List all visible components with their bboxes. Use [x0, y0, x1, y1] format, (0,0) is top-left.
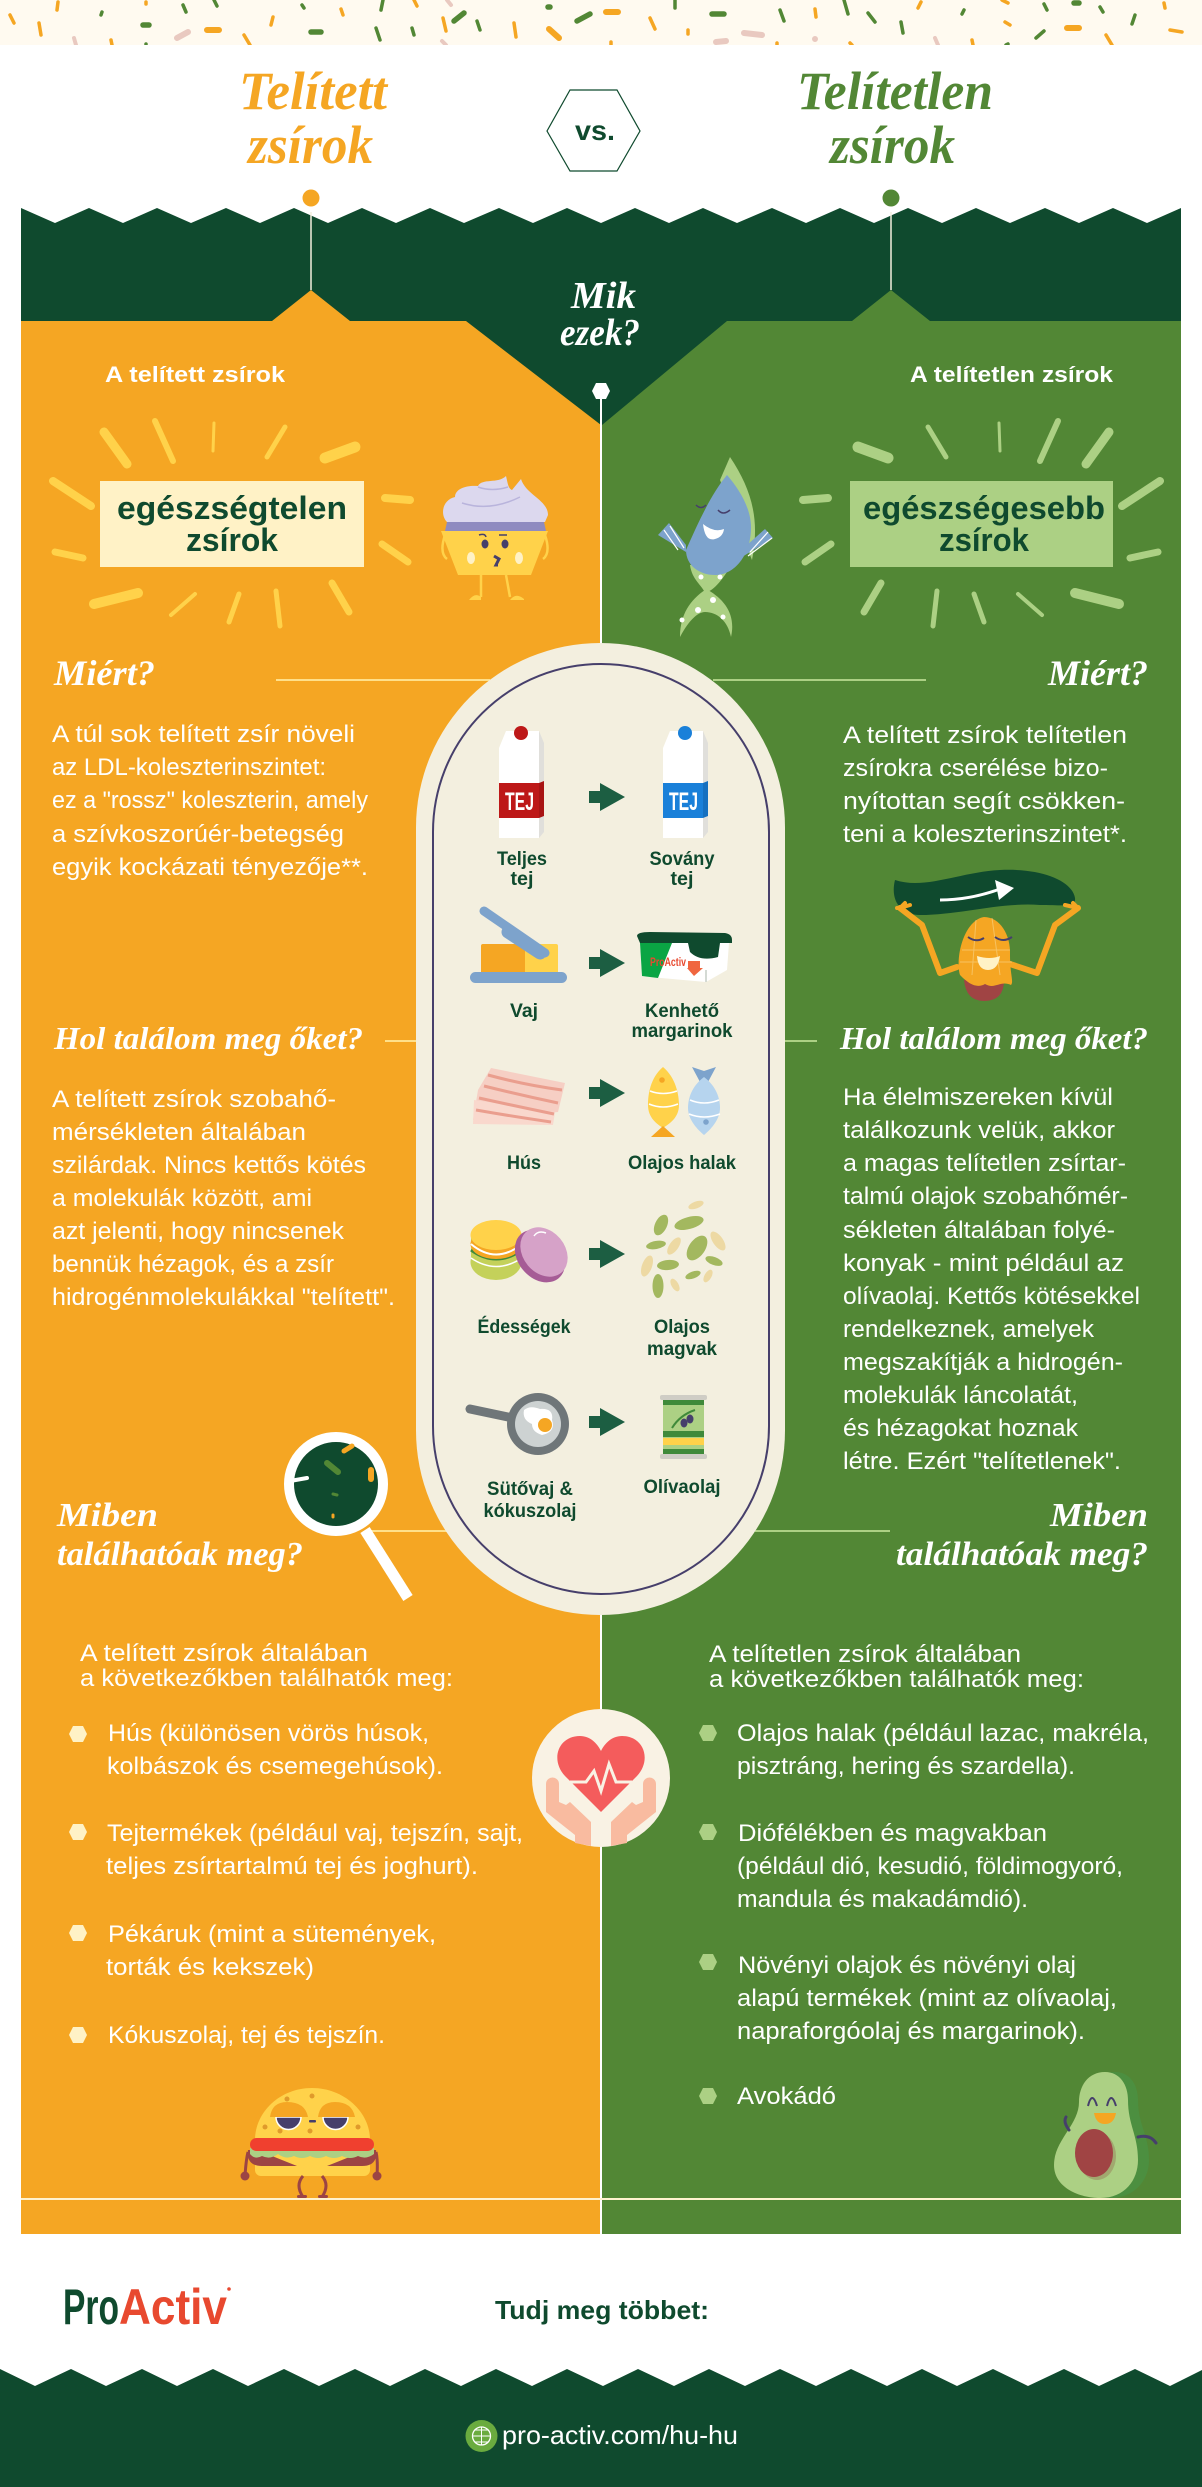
heading: what are these	[560, 275, 640, 354]
label: frying butter and coconut oil: kókuszolaj	[484, 1501, 576, 1522]
bullet list: saturated sources: Hús (különösen vörös húsok,	[108, 1720, 429, 1747]
heading: found in left: Miben	[56, 1497, 158, 1534]
icon: skim milk carton	[663, 726, 708, 838]
icon: butter	[470, 911, 567, 983]
bullet list: unsaturated sources: pisztráng, hering és szardella).	[737, 1753, 1075, 1780]
heading: where left: Hol találom meg őket?	[53, 1020, 363, 1056]
heading: found in right	[896, 1497, 1148, 1573]
heading: where right: Hol találom meg őket?	[839, 1020, 1148, 1056]
heading: why right: Miért?	[1047, 653, 1148, 693]
callout: healthier fats	[850, 481, 1113, 567]
label: oily seeds	[647, 1317, 717, 1360]
label: oily fish: Olajos halak	[628, 1153, 736, 1174]
connector: saturated dot	[302, 190, 320, 290]
icon: fish character	[658, 457, 773, 637]
icon: margarine tub: ProActiv	[650, 955, 686, 969]
bullet list: unsaturated sources: Avokádó	[737, 2083, 836, 2110]
text block: where right: konyak - mint például az	[843, 1250, 1124, 1277]
icon: olive oil can	[660, 1395, 707, 1459]
text block: where right: a magas telítetlen zsírtar-	[843, 1150, 1126, 1177]
swap arrows	[589, 783, 625, 1436]
text block: where left: a molekulák között, ami	[52, 1185, 312, 1212]
icon: macarons	[470, 1218, 577, 1292]
bullet list: unsaturated sources: Olajos halak (például lazac, makréla,	[737, 1720, 1149, 1747]
text block: where right: rendelkeznek, amelyek	[843, 1316, 1095, 1343]
bullet list: saturated sources	[69, 1720, 523, 2049]
title: unsaturated fats: zsírok	[828, 115, 955, 175]
text block: why left	[52, 721, 368, 881]
text block: where left: azt jelenti, hogy nincsenek	[52, 1218, 345, 1245]
title: unsaturated fats	[797, 61, 993, 175]
title: saturated fats: zsírok	[246, 115, 373, 175]
dark green zigzag header	[21, 208, 1181, 450]
text block: where left	[52, 1086, 395, 1311]
divider lines right	[713, 680, 926, 1531]
icon: skim milk carton: TEJ	[669, 788, 698, 816]
bullet list: saturated sources: Tejtermékek (például vaj, tejszín, sajt,	[107, 1820, 523, 1847]
icon: avocado character	[1054, 2072, 1156, 2198]
label: oily seeds: Olajos	[654, 1317, 710, 1338]
label: frying butter and coconut oil	[484, 1479, 576, 1522]
text block: intro right: a következőkben találhatók meg:	[709, 1666, 1084, 1693]
callout: healthier fats: egészségesebb	[863, 490, 1105, 526]
logo: ProActiv: Pro	[63, 2279, 119, 2335]
bullet list: unsaturated sources: napraforgóolaj és margarinok).	[737, 2018, 1085, 2045]
icon: peanut character with banner	[894, 870, 1078, 1001]
text block: where right	[843, 1084, 1140, 1475]
text block: where right: Ha élelmiszereken kívül	[843, 1084, 1113, 1111]
logo: ProActiv: Activ	[119, 2279, 227, 2335]
icon: whole milk carton: TEJ	[505, 788, 534, 816]
bottom rule	[21, 2198, 1181, 2200]
text block: where left: bennük hézagok, és a zsír	[52, 1251, 334, 1278]
text block: where right: talmú olajok szobahőmér-	[843, 1183, 1128, 1210]
heading: what are these: ezek?	[560, 312, 640, 354]
title: unsaturated fats: Telítetlen	[797, 61, 993, 121]
icon: globe	[466, 2420, 498, 2452]
connector: unsaturated dot	[882, 190, 900, 290]
text block: where right: létre. Ezért "telítetlenek".	[843, 1448, 1121, 1475]
bullet list: unsaturated sources	[699, 1720, 1149, 2110]
bullet list: unsaturated sources: Növényi olajok és növényi olaj	[738, 1952, 1076, 1979]
panel: unsaturated green	[602, 290, 1181, 2234]
text block: intro left	[80, 1640, 453, 1692]
label: sweets: Édességek	[478, 1316, 571, 1338]
footer zigzag	[0, 2369, 1202, 2487]
bullet list: unsaturated sources: alapú termékek (mint az olívaolaj,	[737, 1985, 1117, 2012]
label: the unsaturated fats: A telítetlen zsírok	[910, 362, 1114, 387]
label: butter: Vaj	[510, 1001, 538, 1022]
icon: frying pan	[470, 1393, 569, 1455]
text block: intro right: A telítetlen zsírok általában	[709, 1641, 1021, 1668]
versus hexagon: vs.	[575, 115, 615, 146]
icon: burger character	[240, 2088, 382, 2198]
versus hexagon	[547, 90, 640, 171]
heading: what are these: Mik	[570, 275, 636, 317]
label: spreads	[632, 1001, 733, 1042]
label: spreads: Kenhető	[645, 1001, 719, 1022]
label: skim milk: tej	[670, 869, 694, 890]
icon: cupcake character	[441, 476, 548, 600]
bullet list: unsaturated sources: mandula és makadámdió).	[737, 1886, 1028, 1913]
label: the saturated fats: A telített zsírok	[105, 362, 286, 387]
text block: why right: A telített zsírok telítetlen	[843, 722, 1127, 749]
label: whole milk: tej	[510, 869, 534, 890]
label: whole milk: Teljes	[497, 849, 547, 870]
callout: unhealthy fats: zsírok	[186, 522, 278, 558]
text block: where left: szilárdak. Nincs kettős kötés	[52, 1152, 366, 1179]
text block: why right: nyítottan segít csökken-	[843, 788, 1125, 815]
callout: unhealthy fats: egészségtelen	[117, 490, 347, 526]
bullet list: unsaturated sources: Diófélékben és magvakban	[738, 1820, 1047, 1847]
icon: magnifying glass	[289, 1437, 408, 1598]
icon: oily fish	[648, 1067, 720, 1137]
logo: ProActiv	[63, 2279, 231, 2335]
title: saturated fats	[239, 61, 389, 175]
label: learn more: Tudj meg többet:	[495, 2295, 709, 2325]
text block: intro right	[709, 1641, 1084, 1693]
bullet list: saturated sources: torták és kekszek)	[106, 1954, 314, 1981]
bullet list: saturated sources: teljes zsírtartalmú tej és joghurt).	[106, 1853, 478, 1880]
text block: why right	[843, 722, 1127, 848]
text block: where left: A telített zsírok szobahő-	[52, 1086, 336, 1113]
heading: found in right: találhatóak meg?	[896, 1536, 1148, 1573]
callout: healthier fats: zsírok	[939, 522, 1029, 558]
text block: intro left: a következőkben találhatók meg:	[80, 1665, 453, 1692]
text block: why left: ez a "rossz" koleszterin, amely	[52, 787, 368, 814]
text block: why right: zsírokra cserélése bizo-	[843, 755, 1108, 782]
icon: seeds	[639, 1199, 728, 1298]
bullet list: saturated sources: Pékáruk (mint a sütemények,	[108, 1921, 436, 1948]
icon: whole milk carton	[499, 726, 544, 838]
text block: intro left: A telített zsírok általában	[80, 1640, 368, 1667]
label: skim milk	[650, 849, 715, 890]
rays: saturated	[53, 421, 410, 626]
label: frying butter and coconut oil: Sütővaj &	[487, 1479, 573, 1500]
icon: bacon	[473, 1068, 565, 1125]
text block: why right: teni a koleszterinszintet*.	[843, 821, 1127, 848]
text block: why left: A túl sok telített zsír növeli	[52, 721, 355, 748]
label: meat: Hús	[507, 1153, 541, 1174]
callout: unhealthy fats	[100, 481, 364, 567]
icon: heart in hands	[532, 1709, 670, 1847]
text block: where left: mérsékleten általában	[52, 1119, 306, 1146]
title: saturated fats: Telített	[239, 61, 389, 121]
center hexagon and line	[592, 383, 610, 2234]
text block: where left: hidrogénmolekulákkal "telített".	[52, 1284, 395, 1311]
website address: pro-activ.com/hu-hu	[502, 2420, 738, 2450]
panel: saturated orange	[21, 290, 601, 2234]
label: skim milk: Sovány	[650, 849, 715, 870]
confetti band	[0, 0, 1202, 45]
text block: where right: találkozunk velük, akkor	[843, 1117, 1115, 1144]
divider lines left	[276, 680, 490, 1531]
bullet list: saturated sources: kolbászok és csemegehúsok).	[107, 1753, 443, 1780]
text block: why left: egyik kockázati tényezője**.	[52, 854, 368, 881]
text block: why left: az LDL-koleszterinszintet:	[52, 754, 326, 781]
heading: found in left	[56, 1497, 303, 1573]
heading: found in right: Miben	[1049, 1497, 1148, 1534]
rays: unsaturated	[803, 421, 1160, 626]
text block: where right: molekulák láncolatát,	[843, 1382, 1078, 1409]
heading: why left: Miért?	[53, 653, 155, 693]
bullet list: saturated sources: Kókuszolaj, tej és tejszín.	[108, 2022, 385, 2049]
icon: margarine tub	[637, 932, 732, 982]
text block: where right: olívaolaj. Kettős kötésekkel	[843, 1283, 1140, 1310]
text block: where right: és hézagokat hoznak	[843, 1415, 1079, 1442]
label: whole milk	[497, 849, 547, 890]
text block: where right: megszakítják a hidrogén-	[843, 1349, 1123, 1376]
heading: found in left: találhatóak meg?	[57, 1536, 303, 1573]
bullet list: unsaturated sources: (például dió, kesudió, földimogyoró,	[737, 1853, 1123, 1880]
text block: where right: sékleten általában folyé-	[843, 1217, 1115, 1244]
text block: why left: a szívkoszorúér-betegség	[52, 821, 344, 848]
pill panel: swaps	[416, 643, 785, 1615]
label: olive oil: Olívaolaj	[644, 1477, 720, 1498]
label: oily seeds: magvak	[647, 1339, 717, 1360]
label: spreads: margarinok	[632, 1021, 733, 1042]
